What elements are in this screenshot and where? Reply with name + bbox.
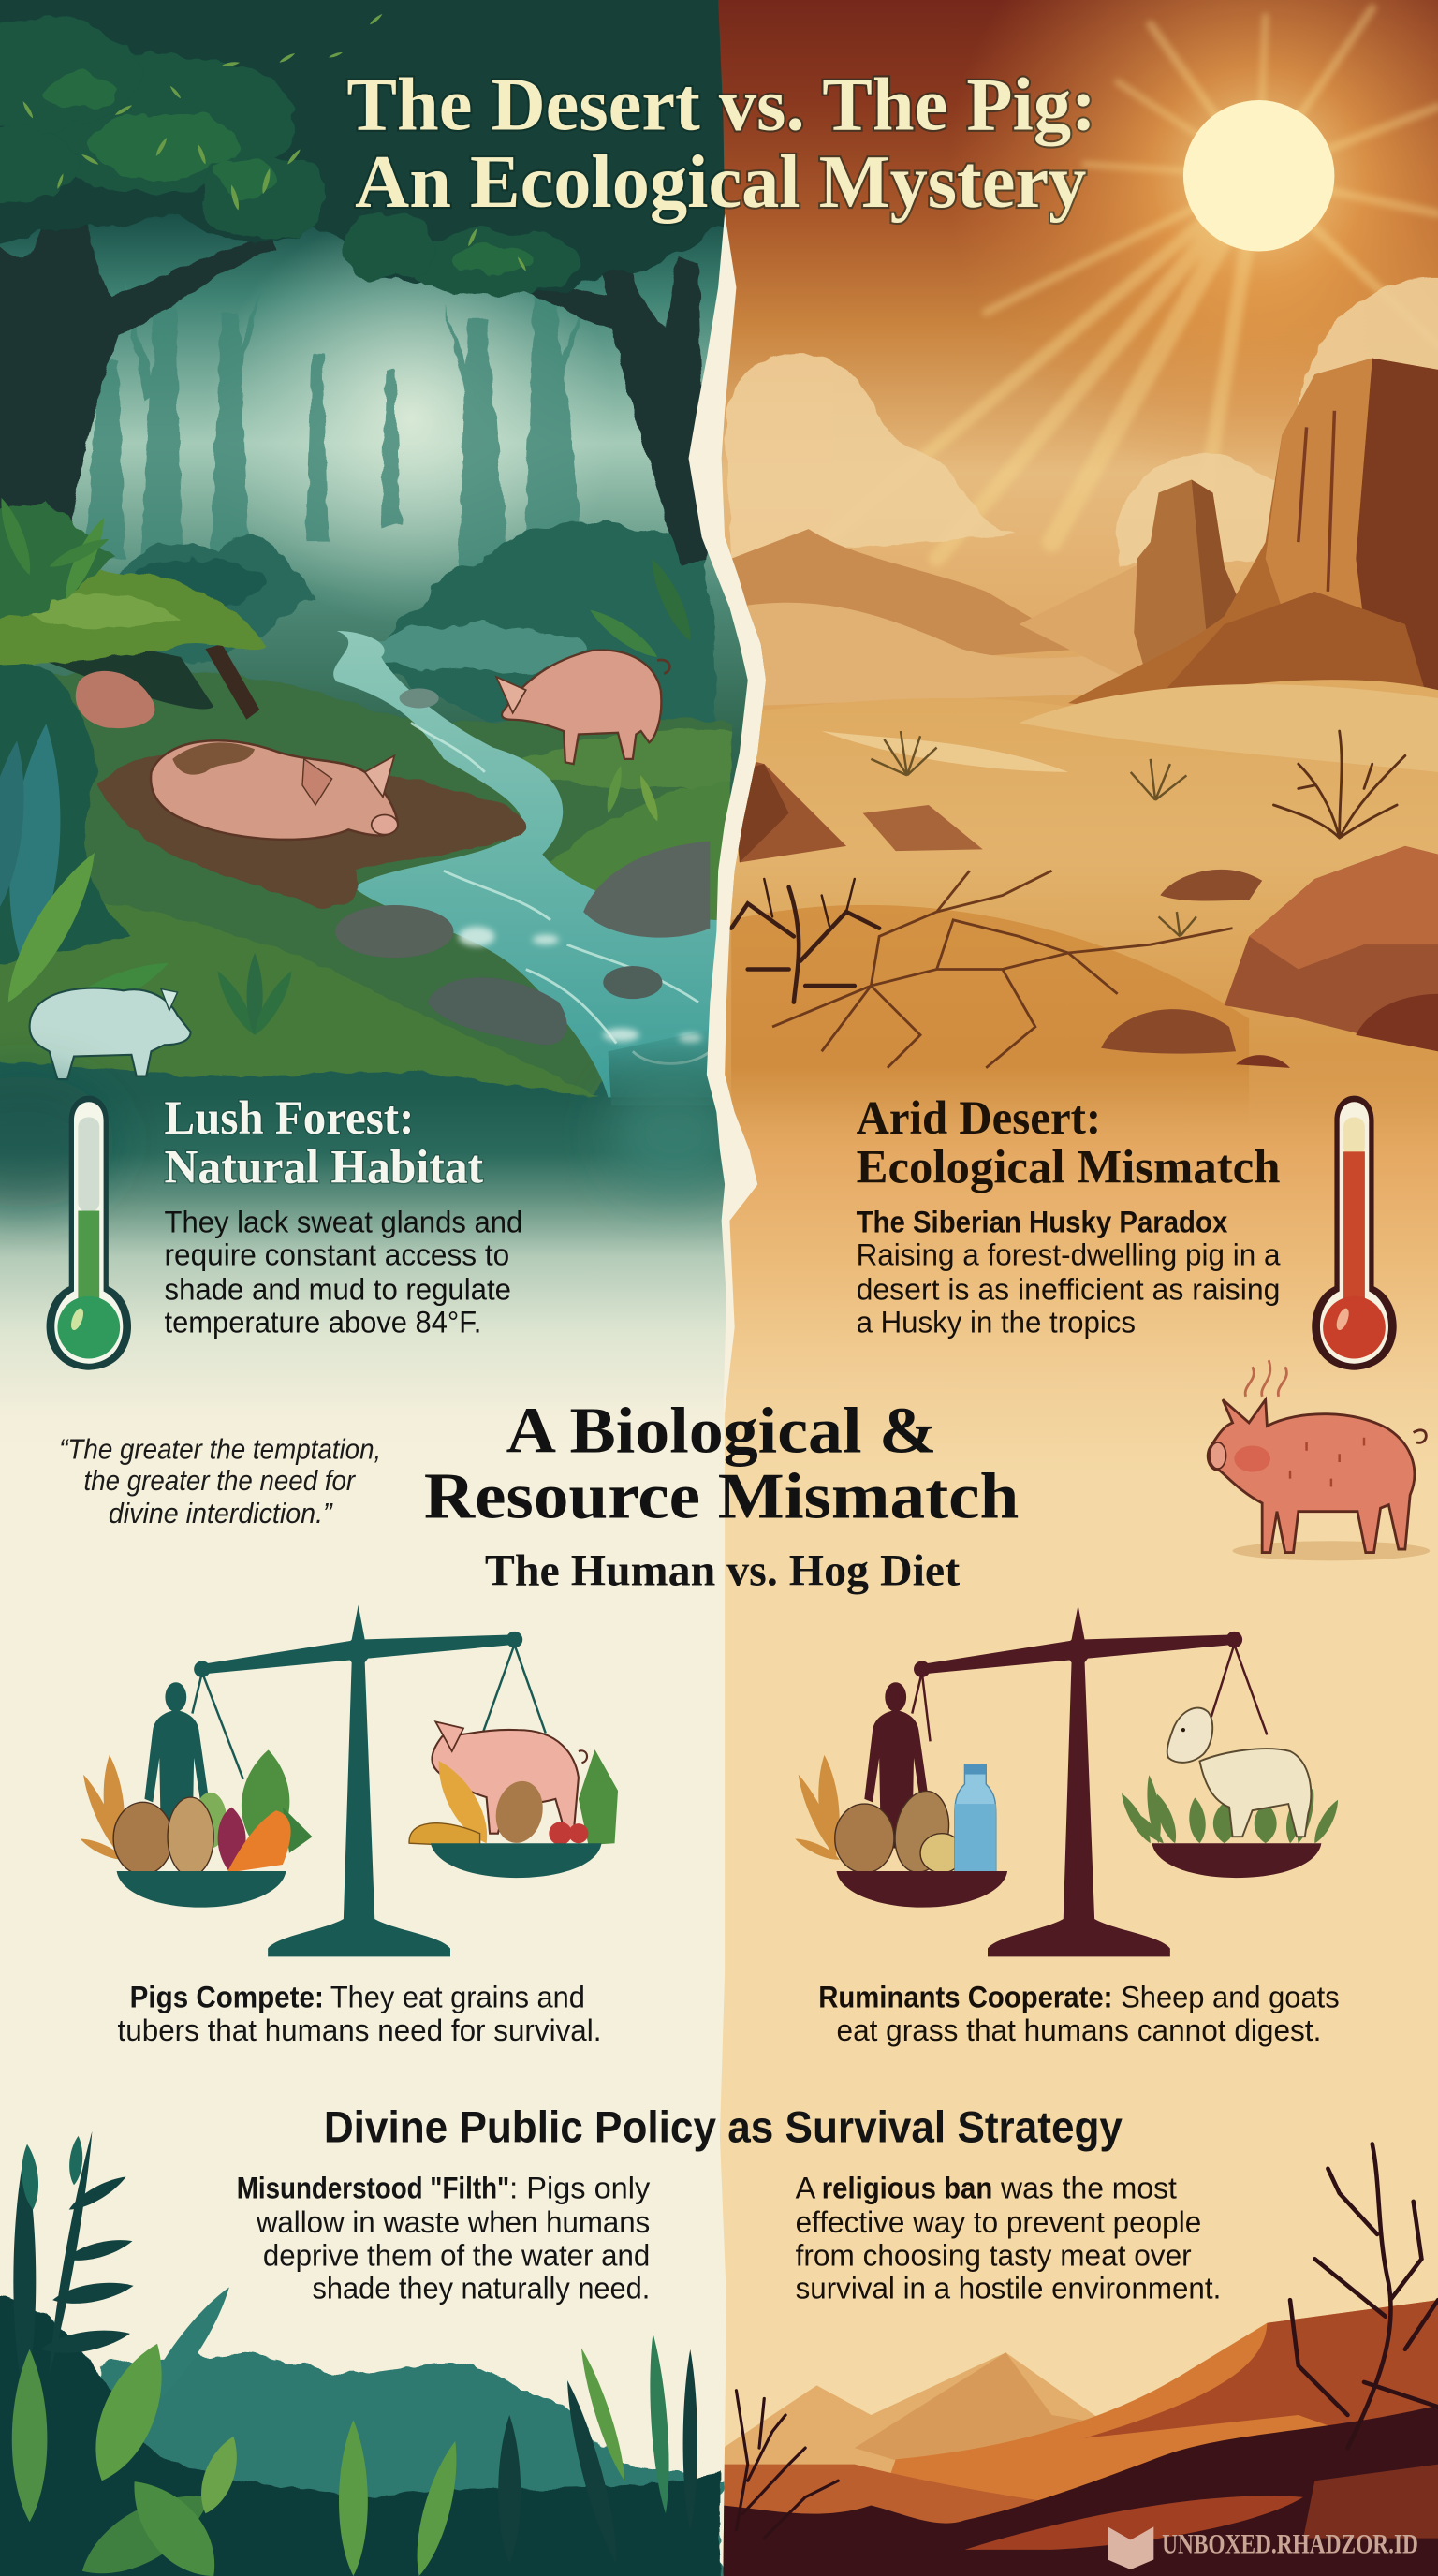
pale pig in foreground (30, 988, 191, 1079)
quote: “The greater the temptation, (59, 1433, 381, 1466)
quote: divine interdiction.” (109, 1497, 333, 1530)
text: forest body: shade and mud to regulate (165, 1272, 511, 1306)
left pan (117, 1871, 286, 1908)
caption: ruminants cooperate (818, 1981, 1340, 2047)
dead branches: right (1290, 2144, 1438, 2448)
panel: arid desert scene (707, 0, 1438, 2576)
pig on right pan (432, 1721, 587, 1834)
text: desert body: Raising a forest-dwelling pig in a (857, 1237, 1281, 1271)
left pan (837, 1871, 1007, 1908)
feed in right pan (409, 1749, 618, 1850)
forest ground (0, 656, 731, 1097)
heading: arid desert: Arid Desert: (857, 1092, 1101, 1145)
standing pig (496, 650, 669, 764)
desert rocks (731, 755, 1438, 1068)
scale strings (912, 1645, 1267, 1741)
stream ripples (411, 723, 710, 1063)
text: forest body: require constant access to (165, 1237, 509, 1271)
subheading: human vs hog diet: The Human vs. Hog Diet (485, 1547, 960, 1596)
quote (59, 1433, 381, 1530)
wheat (78, 1754, 128, 1864)
heading: biological and resource mismatch (424, 1395, 1019, 1533)
small shrubs (871, 731, 1196, 936)
thermometer: desert, hot (1312, 1096, 1397, 1370)
bottom foliage: forest (0, 2130, 720, 2576)
icon: open book (1108, 2526, 1153, 2569)
right pan (1152, 1843, 1321, 1878)
icon: overheated pig (1208, 1360, 1430, 1560)
caption: pigs compete: Pigs Compete: (130, 1981, 324, 2014)
dark undergrowth (0, 2291, 720, 2576)
heading: divine public policy: Divine Public Policy as Survival Strategy (324, 2103, 1123, 2153)
bottom landscape: desert (723, 2300, 1438, 2576)
scale beam and stand (194, 1605, 522, 1956)
stream rocks (335, 688, 710, 1045)
text: desert body: desert is as inefficient as raising (857, 1272, 1280, 1306)
grass (1117, 1774, 1343, 1847)
caption: pigs compete: tubers that humans need for survival. (118, 2013, 601, 2047)
heading: lush forest: Natural Habitat (165, 1142, 483, 1194)
dead branches: left (736, 2391, 838, 2539)
text: misunderstood filth (237, 2171, 651, 2305)
caption: ruminants cooperate: Ruminants Cooperate: (818, 1981, 1112, 2014)
scale: human vs sheep (793, 1605, 1343, 1956)
scale strings (192, 1645, 546, 1779)
title (346, 64, 1096, 224)
heading: biological and resource mismatch: A Biological & (506, 1395, 937, 1468)
heading: arid desert (857, 1092, 1280, 1194)
dead bush (1273, 731, 1405, 838)
scale beam and stand (914, 1605, 1242, 1956)
big green leaves (12, 2349, 47, 2522)
foam on waterfall (459, 927, 702, 1043)
mud wallow (98, 752, 526, 907)
dark stalk with leaves (13, 2130, 135, 2398)
teal background bushes (98, 2352, 720, 2576)
text: desert body (857, 1205, 1281, 1339)
title: An Ecological Mystery (355, 140, 1086, 224)
text: religious ban: was the most (1000, 2171, 1177, 2204)
wallowing pig (151, 740, 398, 840)
stream (333, 631, 720, 1097)
caption: pigs compete (118, 1981, 601, 2047)
heading: biological and resource mismatch: Resource Mismatch (424, 1460, 1019, 1533)
sun rays (921, 2, 1438, 565)
mesa spire (1134, 479, 1282, 690)
text: forest body: They lack sweat glands and (165, 1205, 522, 1238)
sun (1183, 100, 1334, 252)
caption: ruminants cooperate: eat grass that humans cannot digest. (837, 2013, 1321, 2047)
human silhouette (864, 1682, 929, 1848)
text: misunderstood filth: : Pigs only (509, 2171, 651, 2204)
tree trunks (0, 225, 708, 566)
heading: lush forest: Lush Forest: (165, 1092, 414, 1145)
watermark (1108, 2526, 1418, 2569)
sand ground (731, 680, 1438, 1134)
teal fade patches (0, 1076, 740, 1208)
scale: human vs hog (78, 1605, 618, 1956)
text: religious ban: from choosing tasty meat over (796, 2238, 1192, 2272)
title: The Desert vs. The Pig: (346, 64, 1096, 147)
mid forest bushes (82, 523, 716, 731)
text: misunderstood filth: wallow in waste when humans (256, 2205, 650, 2239)
distant forest trees (86, 284, 580, 567)
text: misunderstood filth: shade they naturally need. (313, 2271, 650, 2305)
thermometer: forest, cool (47, 1096, 131, 1370)
text: desert body: a Husky in the tropics (857, 1305, 1136, 1339)
torn paper edge (689, 213, 770, 1412)
dead tree (731, 879, 879, 1003)
text: religious ban (796, 2171, 1221, 2305)
text: misunderstood filth: deprive them of the water and (263, 2238, 650, 2272)
water bottle (955, 1764, 996, 1871)
sheep (1167, 1708, 1311, 1837)
cracked earth (772, 871, 1233, 1068)
rock column (1068, 359, 1438, 723)
text: religious ban: A (796, 2171, 816, 2204)
potatoes (835, 1787, 963, 1877)
fade from stream into teal (609, 1033, 713, 1103)
quote: the greater the need for (84, 1464, 357, 1497)
caption: ruminants cooperate: Sheep and goats (1121, 1981, 1340, 2014)
right pan (431, 1843, 601, 1878)
human silhouette (144, 1682, 209, 1848)
text: misunderstood filth: Misunderstood "Filth" (237, 2171, 509, 2204)
heading: arid desert: Ecological Mismatch (857, 1142, 1280, 1194)
text: desert body: The Siberian Husky Paradox (857, 1205, 1227, 1238)
heading: lush forest (165, 1092, 483, 1194)
text: religious ban: survival in a hostile environment. (796, 2271, 1221, 2305)
text: religious ban: effective way to prevent people (796, 2205, 1201, 2239)
distant dunes (731, 529, 1299, 707)
text: forest body (165, 1205, 522, 1339)
wheat (793, 1754, 844, 1864)
panel: lush forest scene (0, 0, 748, 1393)
caption: pigs compete: They eat grains and (330, 1981, 585, 2014)
clouds (725, 278, 1438, 567)
forest canopy (0, 0, 731, 296)
mossy shelter with pig (0, 501, 268, 728)
text: forest body: temperature above 84°F. (165, 1305, 481, 1339)
vegetables in left pan (113, 1749, 313, 1876)
tropical foliage (0, 495, 698, 1039)
text: religious ban: religious ban (822, 2171, 992, 2204)
